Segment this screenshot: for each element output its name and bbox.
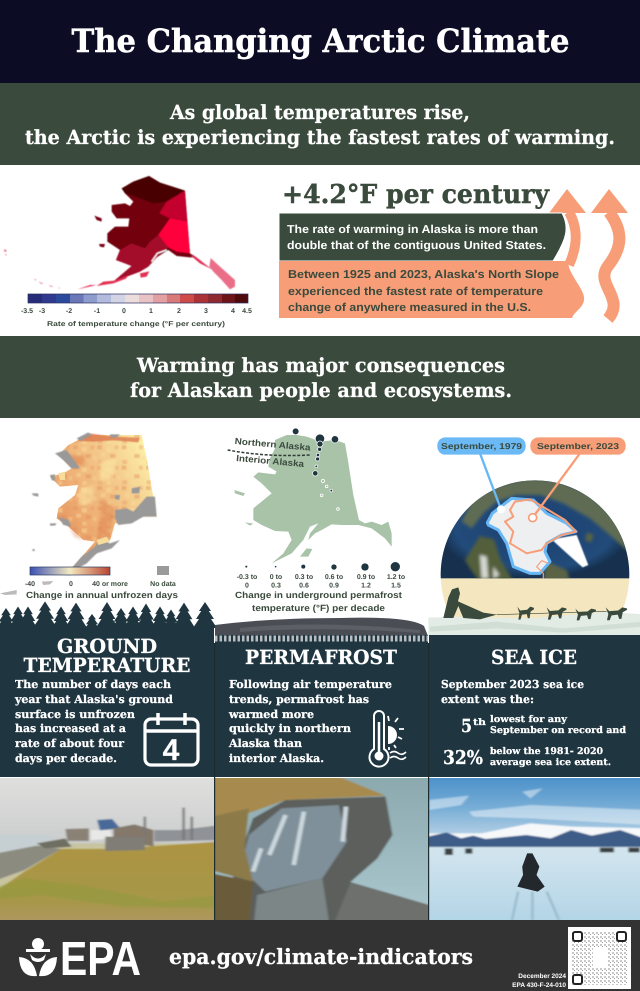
legend: temperature rate: -1	[94, 308, 100, 315]
panel: permafrost: trends, permafrost has	[229, 693, 369, 706]
heading: consequences: for Alaskan people and ecosystems.	[130, 379, 512, 402]
map: permafrost temperature	[228, 428, 400, 571]
photo: coastal village	[0, 778, 214, 920]
footer: December 2024	[518, 973, 566, 980]
photo: eroding permafrost cliff	[215, 778, 428, 920]
panel: permafrost: Following air temperature	[229, 678, 392, 691]
map: unfrozen days	[0, 432, 160, 595]
panel: sea ice: below the 1981- 2020	[490, 746, 603, 757]
legend: permafrost temperature: 0.3 to	[295, 574, 313, 581]
callout: North Slope: change of anywhere measured in the U.S.	[288, 302, 531, 314]
panel: ground temperature: year that Alaska's ground	[14, 693, 173, 706]
legend: permafrost temperature: -0.3 to	[237, 574, 257, 581]
QR code	[568, 927, 631, 989]
legend: temperature rate	[21, 294, 252, 328]
legend: permafrost temperature: Change in underground permafrost	[235, 590, 402, 600]
legend: permafrost temperature: 0.9 to	[357, 574, 375, 581]
legend: permafrost temperature: 0 to	[270, 574, 282, 581]
heading: global warming statement	[0, 83, 640, 165]
callout: North Slope: experienced the fastest rate of temperature	[288, 286, 543, 298]
title banner	[0, 0, 640, 83]
panel: sea ice: September 2023 sea ice	[441, 678, 584, 691]
heading: consequences: Warming has major consequences	[136, 354, 505, 377]
footer: epa.gov/climate-indicators	[169, 944, 473, 969]
legend: temperature rate: Rate of temperature change (°F per century)	[47, 320, 225, 328]
panel: permafrost: Alaska than	[228, 737, 302, 750]
legend: temperature rate: 4	[231, 308, 235, 315]
icon: thermometer and sun	[370, 711, 406, 767]
callout: North Slope: Between 1925 and 2023, Alaska's North Slope	[288, 269, 559, 281]
logo: EPA	[19, 933, 141, 986]
logo: EPA: EPA	[60, 933, 141, 986]
panel: permafrost	[215, 618, 428, 777]
panel: sea ice: 32%	[443, 747, 483, 769]
legend: temperature rate: 4.5	[242, 308, 252, 315]
legend: temperature rate: -3.5	[21, 308, 33, 315]
legend: unfrozen days: Change in annual unfrozen days	[26, 590, 178, 600]
panel: ground temperature: surface is unfrozen	[15, 708, 135, 721]
legend: temperature rate: 1	[149, 308, 153, 315]
panel: ground temperature: days per decade.	[15, 752, 117, 765]
icon: spruce tree line	[0, 601, 217, 632]
icon: calendar	[145, 713, 198, 767]
legend: temperature rate: -2	[66, 308, 72, 315]
callout: rate of warming: double that of the contiguous United States.	[287, 240, 546, 252]
legend: permafrost temperature: 0.3	[271, 582, 281, 590]
labels: northern and interior Alaska: Interior Alaska	[236, 453, 306, 469]
panel: permafrost: PERMAFROST	[245, 646, 397, 669]
panel: sea ice: extent was the:	[441, 693, 534, 706]
callout: rate of warming: The rate of warming in Alaska is more than	[287, 224, 538, 236]
panel: sea ice: 5	[461, 716, 472, 737]
legend: temperature rate: 3	[204, 308, 208, 315]
callout: North Slope	[279, 261, 584, 318]
legend: permafrost temperature: 1.5	[391, 582, 401, 590]
footer: EPA 430-F-24-010	[512, 982, 566, 989]
panel: ground temperature: TEMPERATURE	[24, 654, 190, 677]
callout: rate of warming	[279, 213, 566, 261]
legend: permafrost temperature	[235, 574, 405, 613]
title banner: The Changing Arctic Climate	[72, 22, 570, 60]
panel: ground temperature	[0, 601, 217, 777]
panel: sea ice: th	[473, 718, 487, 728]
panel: sea ice	[429, 635, 640, 777]
panel: sea ice: average sea ice extent.	[490, 757, 611, 768]
panel: permafrost: warmed more	[228, 708, 314, 721]
legend: permafrost temperature: 0.6	[299, 582, 309, 590]
icon: calendar: 4	[163, 734, 180, 767]
panel: sea ice: SEA ICE	[491, 646, 577, 669]
panel: permafrost: quickly in northern	[229, 722, 351, 735]
legend: unfrozen days: -40	[25, 581, 35, 588]
legend: temperature rate: -3	[39, 308, 45, 315]
panel: sea ice: lowest for any	[490, 714, 568, 725]
legend: unfrozen days: 0	[69, 581, 73, 588]
globe: sea ice extent	[438, 478, 632, 628]
legend: permafrost temperature: 0.9	[329, 582, 339, 590]
footer	[0, 920, 640, 991]
panel: ground temperature: rate of about four	[15, 737, 124, 750]
column dividers	[214, 643, 429, 920]
callout lines and labels: sea ice years: September, 2023	[537, 441, 619, 451]
photo: snowmobile on sea ice	[429, 778, 640, 920]
arrows: rising temperature	[549, 189, 628, 319]
legend: temperature rate: 2	[177, 308, 181, 315]
legend: permafrost temperature: temperature (°F) per decade	[252, 603, 385, 613]
stat: per century: +4.2°F per century	[282, 180, 550, 210]
legend: unfrozen days: 40 or more	[92, 581, 128, 588]
panel: ground temperature: has increased at a	[15, 722, 126, 735]
labels: northern and interior Alaska: Northern Alaska	[234, 436, 312, 453]
panel: ground temperature: GROUND	[57, 635, 157, 658]
callout lines and labels: sea ice years: September, 1979	[441, 441, 522, 451]
legend: permafrost temperature: 0	[245, 582, 249, 590]
map: Alaska temperature change	[4, 176, 235, 289]
heading: global warming statement: As global temperatures rise,	[169, 101, 470, 124]
heading: global warming statement: the Arctic is experiencing the fastest rates of warming.	[25, 126, 615, 149]
heading: consequences	[0, 336, 640, 418]
legend: permafrost temperature: 1.2	[361, 582, 371, 590]
panel: permafrost: interior Alaska.	[229, 752, 324, 765]
illustration: dog sled on ice	[428, 587, 640, 637]
legend: temperature rate: 0	[122, 308, 126, 315]
legend: unfrozen days: No data	[150, 580, 176, 588]
callout lines and labels: sea ice years	[437, 437, 626, 522]
legend: permafrost temperature: 0.6 to	[325, 574, 343, 581]
legend: permafrost temperature: 1.2 to	[387, 574, 405, 581]
panel: sea ice: September on record and	[490, 725, 627, 736]
labels: northern and interior Alaska	[234, 436, 312, 469]
legend: unfrozen days	[25, 566, 178, 600]
panel: ground temperature: The number of days each	[15, 678, 171, 691]
